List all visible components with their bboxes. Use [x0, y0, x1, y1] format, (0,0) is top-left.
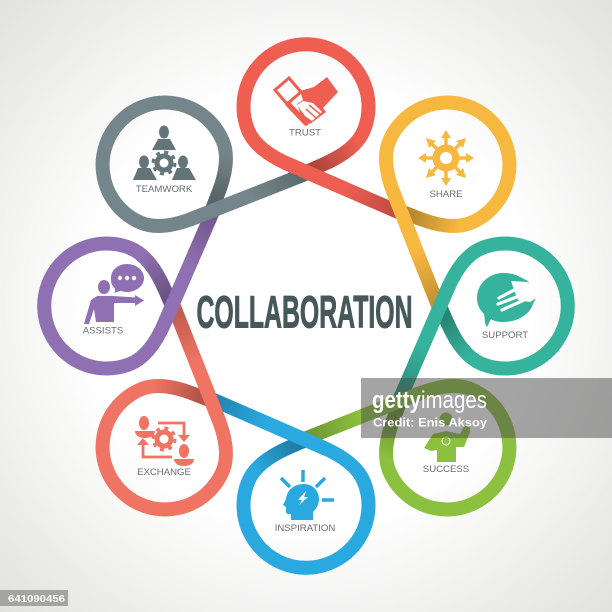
image id tag	[0, 590, 68, 606]
ribbon: share	[328, 77, 558, 307]
ribbon: assists	[44, 212, 213, 368]
ribbon: trust	[244, 44, 400, 213]
icon: handshake	[275, 77, 338, 124]
icon: success person	[424, 412, 470, 462]
watermark: getty images	[361, 378, 612, 438]
label: success: SUCCESS	[423, 464, 469, 475]
label: inspiration: INSPIRATION	[275, 523, 335, 534]
label: assists: ASSISTS	[83, 326, 123, 336]
label: trust: TRUST	[289, 128, 321, 138]
icon: inspiration head	[281, 470, 334, 520]
label: teamwork: TEAMWORK	[136, 184, 193, 195]
icon: teamwork people and gear	[133, 126, 196, 180]
watermark: getty images: gettyimages	[372, 387, 487, 414]
icon: share	[418, 130, 474, 186]
ribbon: teamwork	[77, 54, 307, 284]
label: support: SUPPORT	[482, 330, 528, 341]
ribbon: exchange	[54, 305, 284, 535]
label: exchange: EXCHANGE	[137, 467, 191, 478]
icon: support speech bubble and hand	[477, 273, 538, 327]
label: share: SHARE	[429, 189, 463, 200]
image id tag: 641090456	[8, 593, 65, 605]
ribbon: inspiration	[212, 399, 368, 568]
icon: assists person and speech bubble	[84, 264, 144, 324]
ribbon: success	[305, 328, 535, 558]
title: COLLABORATION	[196, 286, 412, 338]
icon: exchange people and gear	[135, 416, 194, 466]
ribbon: trust tail over teamwork end	[285, 163, 345, 189]
ribbon: support	[399, 244, 568, 400]
watermark: getty images: Credit: Enis Aksoy	[373, 416, 487, 430]
